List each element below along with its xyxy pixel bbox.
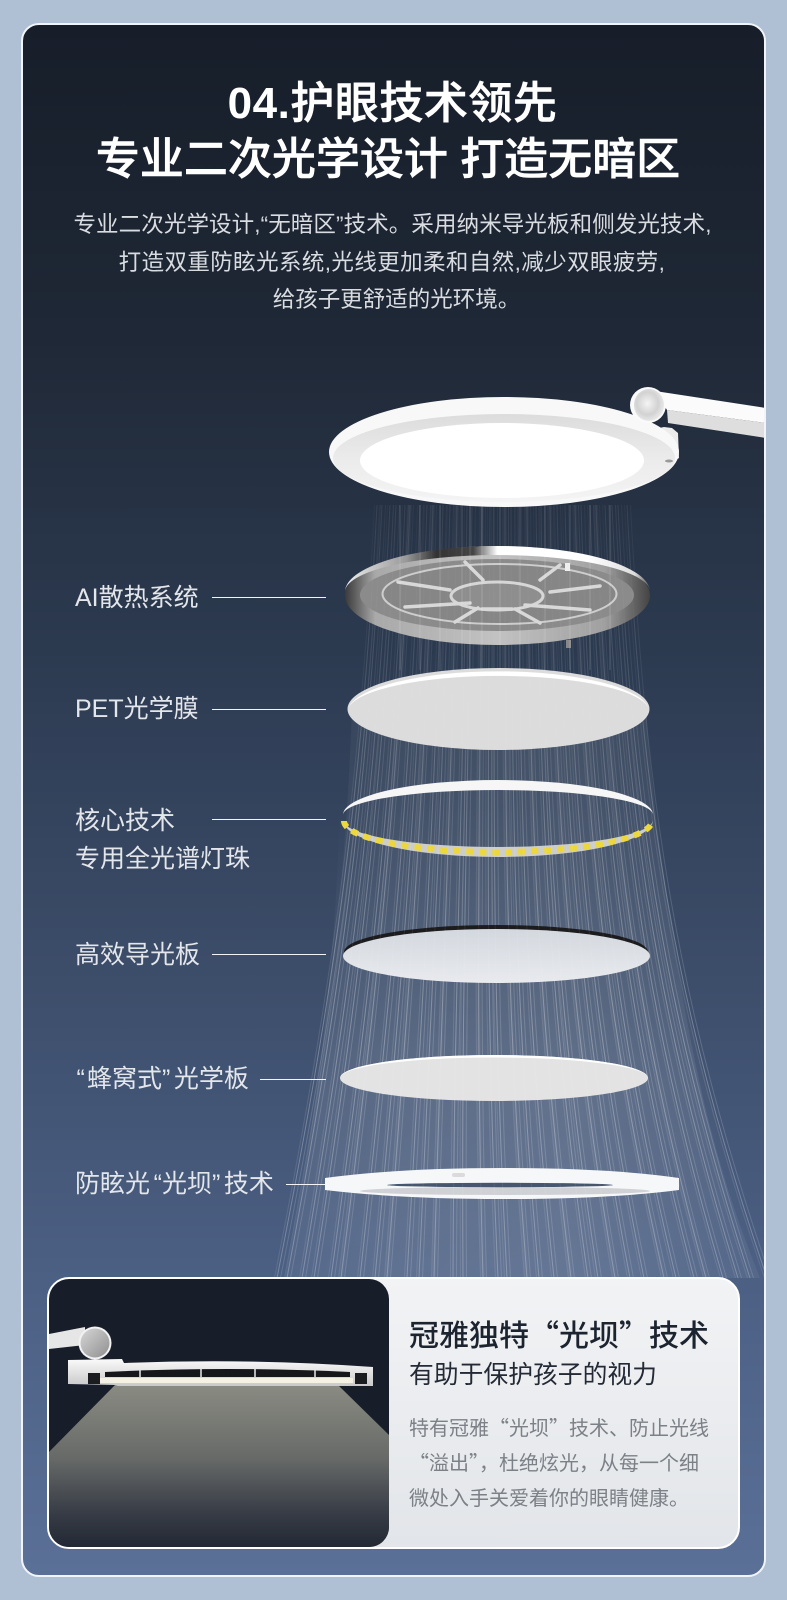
text block: intro paragraph: 专业二次光学设计,“无暗区”技术。采用纳米导光板和侧发光技术,	[73, 212, 712, 237]
title: two line heading: 04.护眼技术领先	[228, 79, 557, 128]
label: anti-glare dam: 防眩光“光坝”技术	[75, 1170, 274, 1198]
text block: callout body	[409, 1412, 709, 1511]
label: core LED beads: 核心技术	[75, 807, 175, 835]
label: light guide plate: 高效导光板	[75, 941, 200, 969]
text block: intro paragraph: 给孩子更舒适的光环境。	[273, 287, 520, 312]
label: core LED beads: 专用全光谱灯珠	[75, 845, 250, 873]
leader line: anti-glare dam	[286, 1184, 326, 1185]
heading: callout title: 冠雅独特“光坝”技术	[409, 1311, 709, 1355]
layer: PET optical film	[348, 668, 650, 750]
leader line: light guide plate	[212, 954, 326, 955]
text block: callout body: “溢出”，杜绝炫光，从每一个细	[409, 1447, 699, 1476]
layer: honeycomb optical plate	[340, 1055, 648, 1101]
leader line: honeycomb plate	[260, 1079, 326, 1080]
subheading: callout subtitle: 有助于保护孩子的视力	[409, 1355, 657, 1391]
title: two line heading: 专业二次光学设计 打造无暗区	[96, 135, 680, 184]
label: PET film: PET光学膜	[75, 695, 199, 723]
lamp head	[329, 387, 679, 507]
layer: LED ring	[343, 780, 653, 857]
text block: callout body: 微处入手关爱着你的眼睛健康。	[409, 1482, 689, 1511]
leader line: AI heat system	[212, 597, 326, 598]
arm of lamp	[655, 391, 766, 438]
leader line: PET film	[212, 709, 326, 710]
label: honeycomb plate: “蜂窝式”光学板	[76, 1065, 249, 1093]
layer: AI heat sink	[345, 546, 650, 648]
illustration: lamp section and light cone	[49, 1326, 389, 1547]
text block: callout body: 特有冠雅“光坝”技术、防止光线	[409, 1412, 709, 1441]
layer: light guide plate	[343, 925, 650, 983]
panel: lamp cross-section image	[49, 1279, 389, 1547]
leader line: core LED beads	[212, 819, 326, 820]
text block: intro paragraph: 打造双重防眩光系统,光线更加柔和自然,减少双眼疲劳,	[119, 250, 665, 275]
beams over the layers	[277, 505, 767, 1278]
layer: anti-glare light dam	[325, 1168, 679, 1199]
text block: intro paragraph	[73, 212, 712, 312]
panel: bottom callout card	[47, 1277, 740, 1549]
light beam fan	[274, 505, 770, 1278]
label: core LED beads	[75, 807, 250, 873]
title: two line heading	[96, 79, 680, 184]
label: AI heat system: AI散热系统	[75, 584, 199, 612]
